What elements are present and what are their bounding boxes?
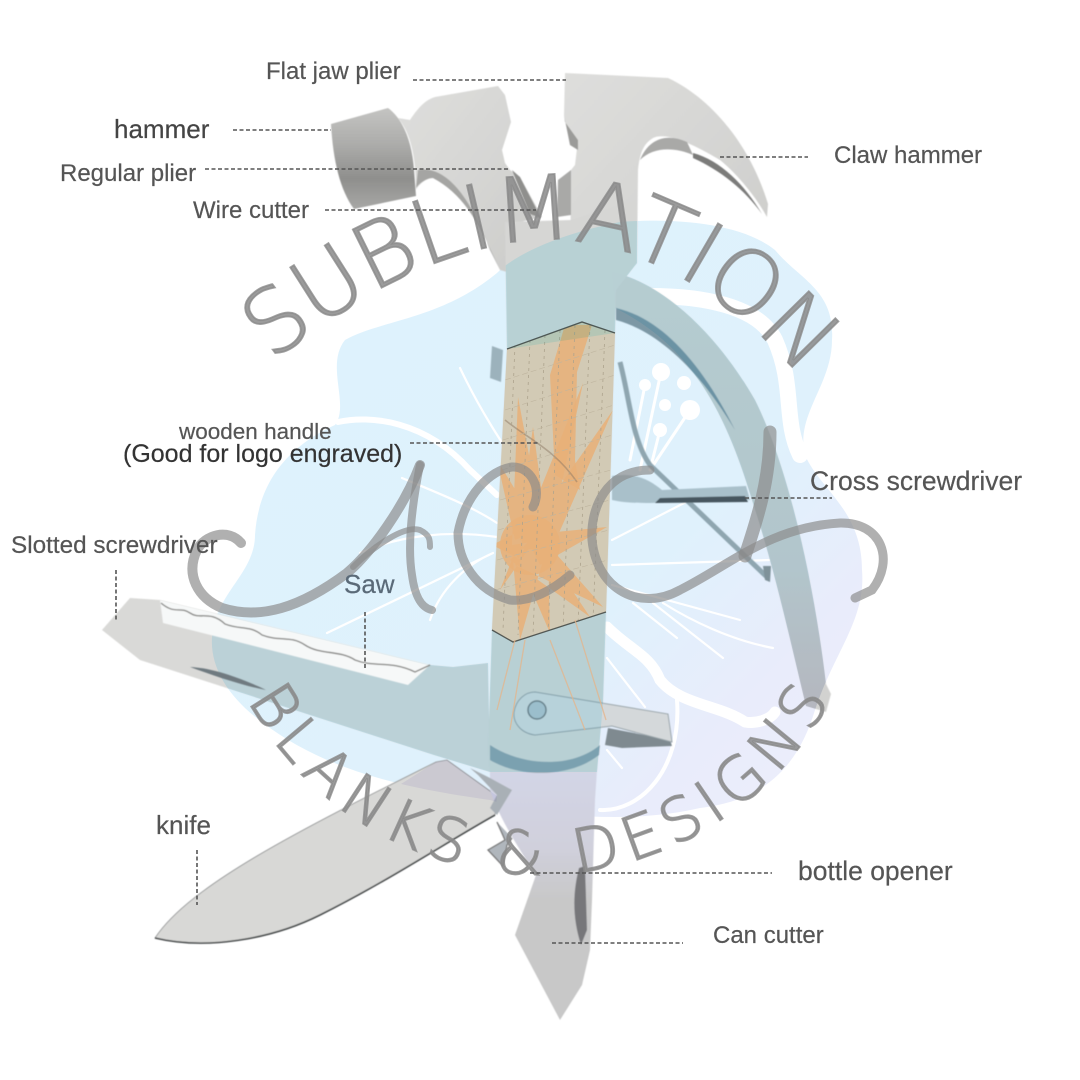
watercolour flower background <box>212 221 862 817</box>
wooden handle <box>492 322 615 642</box>
label: saw <box>344 569 395 668</box>
hammer poll <box>331 108 416 209</box>
can cutter and bottle opener blade <box>490 770 597 1020</box>
label: bottle opener: bottle opener <box>798 856 953 886</box>
cross screwdriver <box>612 362 771 582</box>
label: cross screwdriver: Cross screwdriver <box>810 466 1022 496</box>
label: wire cutter: Wire cutter <box>193 197 309 224</box>
right arm <box>612 272 831 712</box>
saw teeth strip <box>160 600 430 690</box>
label: knife: knife <box>156 810 211 840</box>
spring clip and knife hinge <box>470 768 512 815</box>
watermark: SUBLIMATION: SUBLIMATION <box>244 173 840 368</box>
metal body <box>488 200 637 772</box>
saw and slotted screwdriver blade <box>102 598 490 772</box>
claw hammer head <box>564 73 768 290</box>
label: wooden handle <box>123 419 540 468</box>
label: knife <box>156 810 211 905</box>
label: can cutter: Can cutter <box>713 922 824 949</box>
watermark script logo <box>192 432 883 613</box>
label: claw hammer: Claw hammer <box>834 142 982 169</box>
watermark: BLANKS & DESIGNS: BLANKS & DESIGNS <box>250 682 824 876</box>
label: hammer: hammer <box>114 114 210 144</box>
blue tint over metal <box>212 221 826 802</box>
multi-tool illustration <box>102 73 831 1020</box>
label: slotted screwdriver: Slotted screwdriver <box>11 532 218 559</box>
label: wooden handle: (Good for logo engraved) <box>123 440 402 468</box>
label: wooden handle: wooden handle <box>178 419 332 444</box>
left plier head <box>398 86 542 272</box>
label: saw: Saw <box>344 569 395 599</box>
knife blade <box>155 760 497 943</box>
label: regular plier: Regular plier <box>60 160 196 187</box>
label: flat jaw plier: Flat jaw plier <box>266 58 401 85</box>
locking lever and pin <box>514 692 672 748</box>
